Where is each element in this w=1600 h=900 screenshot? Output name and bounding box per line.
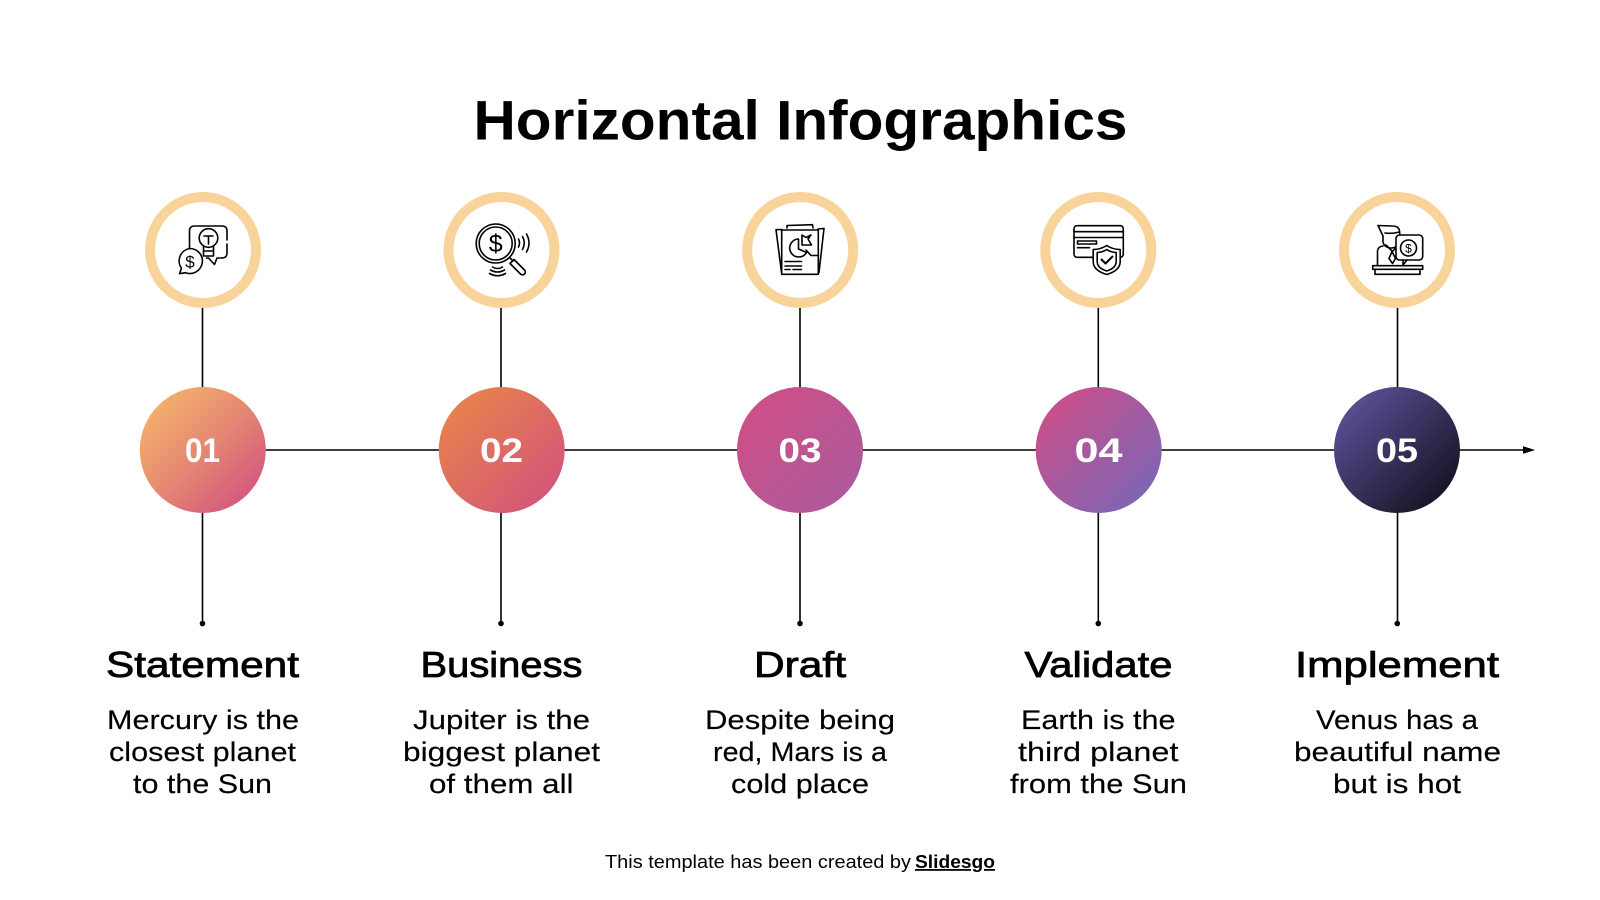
timeline arrow	[203, 446, 1535, 454]
step 1: Statement	[106, 197, 299, 799]
description	[403, 705, 601, 799]
icon ring	[747, 197, 853, 303]
description: Earth is the	[1021, 705, 1176, 735]
number badge	[439, 387, 565, 513]
number badge	[140, 387, 266, 513]
number badge	[1036, 387, 1162, 513]
heading: Validate	[1024, 644, 1172, 685]
icon: report papers with pie chart	[776, 225, 824, 274]
number badge: 05	[1376, 432, 1418, 470]
number badge	[737, 387, 863, 513]
step 5: Implement	[1294, 197, 1501, 799]
description	[107, 705, 299, 799]
description: Mercury is the	[107, 705, 299, 735]
number badge: 01	[185, 432, 220, 470]
connector	[1096, 308, 1101, 626]
icon ring	[150, 197, 256, 303]
description: closest planet	[109, 737, 297, 767]
icon: idea and money speech bubbles	[179, 226, 227, 274]
description: third planet	[1018, 737, 1179, 767]
icon: speaker at desk with money bubble	[1373, 226, 1423, 274]
icon: credit card with shield	[1074, 226, 1123, 274]
connector	[200, 308, 205, 626]
description: from the Sun	[1010, 769, 1187, 799]
description: to the Sun	[133, 769, 272, 799]
heading: Business	[420, 644, 582, 685]
icon: idea and money speech bubbles: $	[185, 252, 195, 272]
icon ring	[448, 197, 554, 303]
icon ring	[1344, 197, 1450, 303]
heading: Statement	[106, 644, 299, 685]
description: beautiful name	[1294, 737, 1501, 767]
footer credit: This template has been created by	[605, 852, 911, 872]
icon: dollar magnifier: $	[489, 230, 503, 258]
description	[1294, 705, 1501, 799]
description: Venus has a	[1316, 705, 1478, 735]
icon: speaker at desk with money bubble: $	[1405, 242, 1412, 256]
heading: Implement	[1295, 644, 1499, 685]
step 3: Draft	[705, 197, 895, 799]
description: but is hot	[1333, 769, 1462, 799]
description: Despite being	[705, 705, 895, 735]
description: red, Mars is a	[713, 737, 887, 767]
connector	[498, 308, 504, 626]
connector	[1394, 308, 1400, 626]
description: Jupiter is the	[413, 705, 590, 735]
footer credit: Slidesgo	[915, 852, 995, 872]
description	[705, 705, 895, 799]
icon ring	[1045, 197, 1151, 303]
step 2: Business	[403, 197, 601, 799]
icon: dollar magnifier	[476, 224, 529, 276]
description: of them all	[429, 769, 574, 799]
number badge: 04	[1074, 432, 1123, 470]
description: biggest planet	[403, 737, 601, 767]
description	[1010, 705, 1187, 799]
number badge: 03	[778, 432, 822, 470]
title: Horizontal Infographics	[474, 88, 1128, 152]
number badge: 02	[480, 432, 523, 470]
step 4: Validate	[1010, 197, 1187, 799]
heading: Draft	[754, 644, 846, 685]
number badge	[1334, 387, 1460, 513]
connector	[797, 308, 803, 626]
description: cold place	[731, 769, 869, 799]
